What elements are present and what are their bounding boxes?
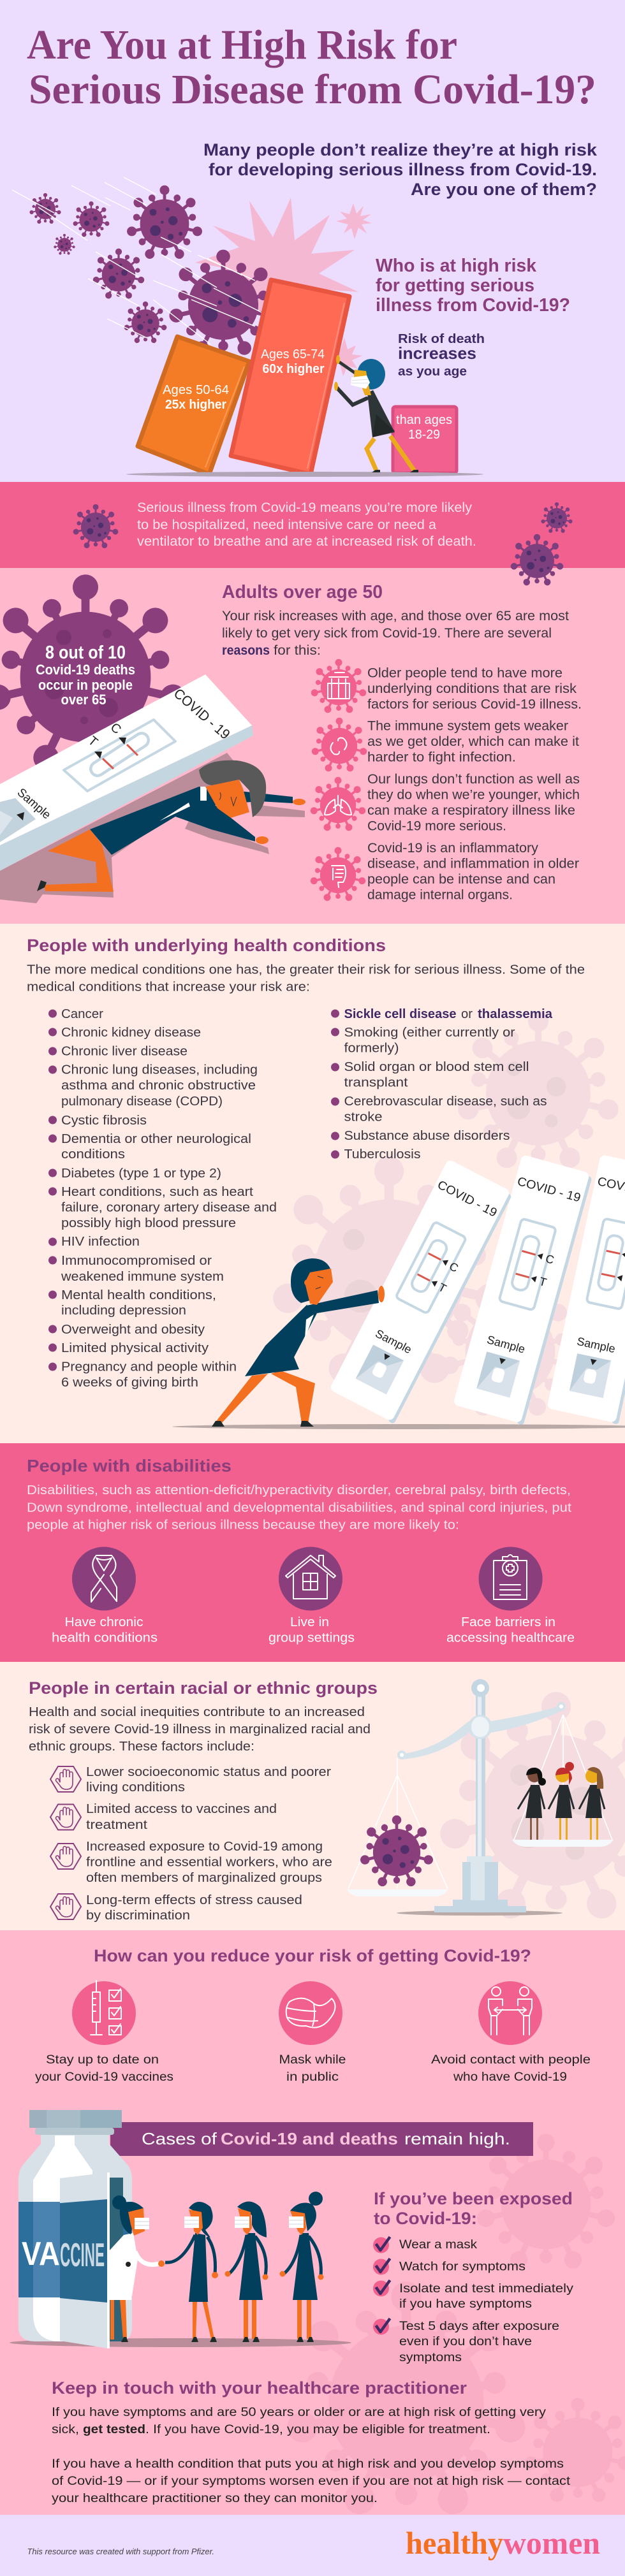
list: right column: thalassemia bbox=[478, 1007, 553, 1021]
list: left column: asthma and chronic obstructive bbox=[61, 1079, 256, 1093]
list: left column bbox=[48, 1007, 277, 1390]
reason 1: factors for serious Covid-19 illness. bbox=[367, 697, 582, 712]
item: barriers in healthcare bbox=[446, 1546, 575, 1645]
box: than ages 18-29 bbox=[393, 407, 457, 473]
panel: racial or ethnic groups bbox=[0, 1662, 625, 1930]
paragraph: contact practitioner: of Covid-19 — or if your symptoms worsen even if you are not at high risk — contact bbox=[52, 2475, 571, 2488]
intro text: Many people don’t realize they’re at high risk bbox=[203, 140, 598, 159]
virus left bbox=[73, 504, 119, 549]
list: left column: Chronic lung diseases, including bbox=[61, 1063, 258, 1077]
list: left column: 6 weeks of giving birth bbox=[61, 1376, 198, 1390]
banner: cases remain high: Cases of bbox=[142, 2129, 217, 2148]
heading: keep in touch: Keep in touch with your healthcare practitioner bbox=[52, 2378, 467, 2398]
paragraph: contact practitioner: your healthcare practitioner so they can monitor you. bbox=[52, 2492, 378, 2505]
checklist: Isolate and test immediately bbox=[399, 2282, 574, 2296]
tip: avoid contact: who have Covid-19 bbox=[453, 2070, 567, 2084]
virus on scale bbox=[360, 1816, 434, 1888]
list: left column: including depression bbox=[61, 1304, 186, 1318]
covid test device: COVID - 19 bbox=[171, 685, 233, 743]
paragraph bbox=[27, 1483, 571, 1532]
woman pushing bbox=[334, 355, 418, 472]
speed lines bbox=[12, 177, 261, 344]
banner: cases remain high: remain high. bbox=[404, 2129, 510, 2148]
reason 4: people can be intense and can bbox=[367, 872, 555, 887]
reason 2: The immune system gets weaker bbox=[367, 719, 568, 733]
paragraph: get tested bbox=[52, 2406, 547, 2436]
heading: if exposed: If you’ve been exposed bbox=[374, 2189, 573, 2208]
ground shadow bbox=[10, 2338, 351, 2347]
banner text: ventilator to breathe and are at increased risk of death. bbox=[137, 534, 476, 549]
icon: ribbon bbox=[91, 1555, 117, 1602]
reason 4: damage internal organs. bbox=[367, 888, 513, 903]
item: chronic health conditions bbox=[52, 1546, 158, 1645]
item: barriers in healthcare: Face barriers in bbox=[461, 1615, 555, 1629]
tip: vaccines: your Covid-19 vaccines bbox=[35, 2070, 173, 2084]
virus with statistic: 8 out of 10 bbox=[45, 643, 126, 663]
item: chronic health conditions: health conditions bbox=[52, 1631, 158, 1645]
box: ages 50-64: Ages 50-64 bbox=[163, 383, 229, 397]
panel: hero bbox=[0, 0, 625, 483]
paragraph: contact practitioner: If you have a health condition that puts you at high risk and you develop symptoms bbox=[52, 2457, 564, 2471]
risk of death note bbox=[398, 332, 485, 379]
heading: adults over age 50: Adults over age 50 bbox=[222, 582, 383, 602]
reason 2: harder to fight infection. bbox=[367, 750, 516, 765]
box: ages 65-74: 60x higher bbox=[263, 362, 325, 376]
paragraph: contact practitioner bbox=[52, 2457, 571, 2505]
heading: How can you reduce your risk of getting Covid-19? bbox=[94, 1946, 531, 1965]
viruses falling bbox=[29, 186, 279, 357]
checklist: Test 5 days after exposure bbox=[399, 2320, 559, 2333]
starburst small bbox=[336, 203, 372, 239]
starburst behind woman bbox=[338, 338, 362, 376]
paragraph: get tested: sick, bbox=[52, 2423, 79, 2436]
panel: adults over age 50 bbox=[0, 568, 625, 924]
box: ages 65-74: Ages 65-74 bbox=[261, 347, 325, 361]
covid test device: T bbox=[85, 734, 100, 750]
icon: hand bbox=[50, 1894, 81, 1919]
list: left column: Mental health conditions, bbox=[61, 1288, 216, 1302]
list: left column: weakened immune system bbox=[61, 1270, 224, 1284]
panel: banner bbox=[0, 482, 625, 586]
item: group settings: Live in bbox=[290, 1615, 329, 1629]
box: ages 65-74 bbox=[231, 280, 349, 474]
list: left column: HIV infection bbox=[61, 1235, 140, 1249]
reason 3: they do when we’re younger, which bbox=[367, 788, 580, 802]
intro paragraph: medical conditions that increase your risk are: bbox=[27, 980, 310, 994]
banner: cases remain high: Covid-19 and deaths bbox=[221, 2129, 398, 2148]
intro text: for developing serious illness from Covid-19. bbox=[209, 160, 597, 179]
list: right column: stroke bbox=[344, 1110, 383, 1124]
list: right column: Tuberculosis bbox=[344, 1147, 421, 1161]
list: right column: Solid organ or blood stem cell bbox=[344, 1060, 529, 1074]
reason 3: can make a respiratory illness like bbox=[367, 803, 575, 818]
list: left column: failure, coronary artery disease and bbox=[61, 1201, 277, 1215]
subheading: who is at high risk: Who is at high risk bbox=[376, 256, 537, 276]
ground shadow bbox=[172, 1424, 625, 1429]
intro paragraph bbox=[27, 963, 585, 994]
icon: intestines bbox=[310, 847, 366, 902]
banner text bbox=[137, 500, 476, 549]
intro text: Are you one of them? bbox=[411, 180, 597, 199]
box: ages 50-64 bbox=[138, 337, 249, 474]
list: left column: Diabetes (type 1 or type 2) bbox=[61, 1167, 221, 1181]
logo: healthywomen: women bbox=[503, 2525, 600, 2561]
risk of death note: increases bbox=[398, 344, 476, 363]
heading: if exposed: to Covid-19: bbox=[374, 2209, 477, 2228]
intro paragraph: for this: bbox=[274, 643, 321, 658]
reason 4: disease, and inflammation in older bbox=[367, 857, 579, 871]
paragraph: get tested: If you have symptoms and are 50 years or older or are at high risk of getting very bbox=[52, 2406, 547, 2419]
factor 2: Limited access to vaccines and bbox=[86, 1802, 277, 1816]
banner: cases remain high bbox=[110, 2122, 533, 2156]
factor 1: Lower socioeconomic status and poorer bbox=[86, 1765, 331, 1779]
list: left column: Heart conditions, such as heart bbox=[61, 1185, 253, 1199]
balance scale bbox=[347, 1679, 614, 1916]
risk of death note: Risk of death bbox=[398, 332, 485, 346]
item: group settings bbox=[268, 1546, 355, 1645]
logo: healthywomen bbox=[406, 2525, 600, 2561]
list: right column: Cerebrovascular disease, such as bbox=[344, 1095, 547, 1109]
panel: reduce your risk bbox=[0, 1930, 625, 2519]
reason 1: Older people tend to have more bbox=[367, 666, 562, 681]
intro text bbox=[203, 140, 598, 199]
icon: syringe and checklist bbox=[91, 1981, 121, 2035]
banner text: to be hospitalized, need intensive care or need a bbox=[137, 518, 436, 532]
item: barriers in healthcare: accessing healthcare bbox=[446, 1631, 575, 1645]
banner text: Serious illness from Covid-19 means you’re more likely bbox=[137, 500, 472, 515]
factor 2: treatment bbox=[86, 1818, 148, 1832]
factor 3: often members of marginalized groups bbox=[86, 1871, 322, 1885]
icon: hand bbox=[50, 1766, 81, 1792]
icon: two people apart bbox=[489, 1999, 532, 2035]
list: left column: Chronic kidney disease bbox=[61, 1026, 201, 1040]
covid test 1 bbox=[328, 1159, 513, 1424]
factor 3 bbox=[50, 1840, 332, 1885]
vaccine vial bbox=[18, 2110, 132, 2341]
list: right column: or bbox=[461, 1007, 473, 1021]
woman pushing tests bbox=[212, 1258, 385, 1427]
reason 4 bbox=[310, 841, 579, 903]
faded viruses bbox=[270, 1011, 621, 1418]
tip: vaccines: Stay up to date on bbox=[46, 2053, 159, 2067]
tip: mask: Mask while bbox=[279, 2053, 346, 2067]
list: left column: Cancer bbox=[61, 1007, 103, 1021]
intro paragraph: The more medical conditions one has, the greater their risk for serious illness. Some of the bbox=[27, 963, 585, 977]
faded virus bbox=[438, 1692, 625, 1923]
panel: reduce your risk: CCINE bbox=[60, 2237, 105, 2274]
logo: healthywomen: healthy bbox=[406, 2525, 503, 2561]
list: right column: Smoking (either currently or bbox=[344, 1026, 515, 1040]
intro paragraph bbox=[222, 609, 569, 658]
list: left column: possibly high blood pressure bbox=[61, 1216, 236, 1230]
list: left column: Limited physical activity bbox=[61, 1341, 209, 1355]
title bbox=[27, 22, 596, 113]
icon: clipboard bbox=[494, 1555, 527, 1599]
doctor bbox=[110, 2195, 159, 2342]
subheading: who is at high risk: illness from Covid-19? bbox=[376, 295, 570, 316]
factor 4 bbox=[50, 1893, 302, 1923]
reason 3: Covid-19 more serious. bbox=[367, 819, 506, 834]
list: right column: Sickle cell disease bbox=[344, 1007, 457, 1021]
panel: people with disabilities bbox=[0, 1443, 625, 1662]
reason 2 bbox=[311, 718, 579, 773]
virus right large bbox=[510, 534, 564, 586]
box: ages 50-64: 25x higher bbox=[165, 398, 226, 412]
covid test 3 bbox=[547, 1154, 625, 1425]
background viruses bbox=[284, 2134, 625, 2519]
list: left column: Pregnancy and people within bbox=[61, 1360, 237, 1374]
covid test device: Sample bbox=[15, 786, 53, 822]
icon: face mask bbox=[286, 1998, 335, 2028]
box: than ages 18-29: 18-29 bbox=[408, 428, 440, 442]
fallen woman bbox=[37, 760, 305, 892]
paragraph: Health and social inequities contribute to an increased bbox=[29, 1705, 365, 1719]
panel: footer bbox=[0, 2515, 625, 2576]
factor 1: living conditions bbox=[86, 1780, 185, 1794]
factor 3: frontline and essential workers, who are bbox=[86, 1855, 332, 1869]
checklist: Watch for symptoms bbox=[399, 2260, 526, 2274]
shadow bbox=[0, 753, 245, 903]
covid test 2 bbox=[453, 1154, 593, 1425]
woman 2 bbox=[224, 2202, 268, 2342]
tip: avoid contact bbox=[431, 1981, 591, 2084]
reason 3: Our lungs don’t function as well as bbox=[367, 772, 580, 787]
virus with statistic bbox=[0, 574, 188, 775]
list: left column: Dementia or other neurological bbox=[61, 1132, 251, 1146]
risk of death note: as you age bbox=[398, 365, 467, 379]
heading: People in certain racial or ethnic groups bbox=[29, 1678, 378, 1698]
vial door bbox=[60, 2172, 110, 2348]
vaccine vial: VA bbox=[22, 2236, 60, 2273]
tip: avoid contact: Avoid contact with people bbox=[431, 2053, 591, 2067]
virus with statistic: Covid-19 deaths bbox=[36, 662, 135, 678]
box: than ages 18-29: than ages bbox=[396, 413, 452, 427]
three women on scale bbox=[518, 1762, 605, 1840]
icon: germ bbox=[311, 718, 367, 773]
factor 2 bbox=[50, 1802, 277, 1832]
title: Serious Disease from Covid-19? bbox=[29, 66, 596, 113]
reason 1: underlying conditions that are risk bbox=[367, 681, 577, 696]
icon: house bbox=[286, 1555, 335, 1599]
icon: lungs bbox=[310, 777, 366, 832]
list: right column: transplant bbox=[344, 1076, 408, 1090]
icon: hand bbox=[50, 1804, 81, 1830]
reason 1 bbox=[311, 659, 582, 714]
list: left column: Overweight and obesity bbox=[61, 1323, 205, 1337]
icon: hand bbox=[50, 1844, 81, 1869]
ground shadow bbox=[126, 472, 483, 477]
paragraph: Disabilities, such as attention-deficit/hyperactivity disorder, cerebral palsy, birth defects, bbox=[27, 1483, 571, 1497]
paragraph: get tested: . If you have Covid-19, you may be eligible for treatment. bbox=[145, 2423, 490, 2436]
icon: test tubes bbox=[311, 659, 367, 714]
woman 3 bbox=[279, 2192, 324, 2342]
checklist: if you have symptoms bbox=[399, 2297, 532, 2311]
subheading: who is at high risk: for getting serious bbox=[376, 275, 534, 296]
paragraph: Down syndrome, intellectual and developmental disabilities, and spinal cord injuries, put bbox=[27, 1501, 571, 1515]
subheading: who is at high risk bbox=[376, 256, 570, 316]
sponsor note: This resource was created with support from Pfizer. bbox=[27, 2547, 214, 2556]
reason 2: as we get older, which can make it bbox=[367, 734, 579, 749]
paragraph: risk of severe Covid-19 illness in marginalized racial and bbox=[29, 1722, 371, 1736]
intro paragraph: reasons bbox=[222, 643, 270, 658]
list: left column: Chronic liver disease bbox=[61, 1045, 188, 1059]
reason 4: Covid-19 is an inflammatory bbox=[367, 841, 539, 855]
list: left column: pulmonary disease (COPD) bbox=[61, 1095, 223, 1109]
list: right column bbox=[331, 1007, 553, 1161]
checklist: even if you don’t have bbox=[399, 2335, 532, 2348]
covid test device: C bbox=[108, 720, 124, 737]
tip: mask: in public bbox=[286, 2070, 339, 2084]
heading: People with disabilities bbox=[27, 1457, 232, 1476]
virus right small bbox=[541, 502, 573, 534]
intro paragraph: likely to get very sick from Covid-19. There are several bbox=[222, 626, 552, 641]
virus with statistic: over 65 bbox=[61, 692, 106, 708]
item: chronic health conditions: Have chronic bbox=[65, 1615, 143, 1629]
woman 1 bbox=[158, 2202, 218, 2342]
starburst large bbox=[195, 198, 358, 331]
list: left column: conditions bbox=[61, 1147, 125, 1161]
tip: vaccines bbox=[35, 1981, 173, 2084]
panel: underlying conditions bbox=[0, 924, 625, 1443]
list: left column: Immunocompromised or bbox=[61, 1254, 212, 1268]
checklist: Wear a mask bbox=[399, 2238, 478, 2252]
paragraph: get tested: get tested bbox=[83, 2423, 145, 2436]
intro paragraph: Your risk increases with age, and those over 65 are most bbox=[222, 609, 569, 623]
list: right column: formerly) bbox=[344, 1042, 399, 1056]
factor 3: Increased exposure to Covid-19 among bbox=[86, 1840, 323, 1854]
checklist bbox=[373, 2237, 574, 2364]
factor 4: by discrimination bbox=[86, 1909, 190, 1923]
paragraph bbox=[29, 1705, 371, 1754]
factor 4: Long-term effects of stress caused bbox=[86, 1893, 302, 1907]
heading: if exposed bbox=[374, 2189, 573, 2228]
title: Are You at High Risk for bbox=[27, 22, 457, 68]
checklist: symptoms bbox=[399, 2351, 462, 2364]
paragraph: ethnic groups. These factors include: bbox=[29, 1740, 254, 1754]
list: right column: Substance abuse disorders bbox=[344, 1129, 510, 1143]
paragraph: people at higher risk of serious illness because they are more likely to: bbox=[27, 1518, 459, 1532]
heading: People with underlying health conditions bbox=[27, 936, 386, 955]
item: group settings: group settings bbox=[268, 1631, 355, 1645]
factor 1 bbox=[50, 1765, 331, 1794]
reason 3 bbox=[310, 772, 580, 834]
virus with statistic: occur in people bbox=[38, 677, 133, 693]
tip: mask bbox=[279, 1981, 346, 2084]
covid test device bbox=[0, 674, 253, 871]
list: left column: Cystic fibrosis bbox=[61, 1114, 147, 1128]
